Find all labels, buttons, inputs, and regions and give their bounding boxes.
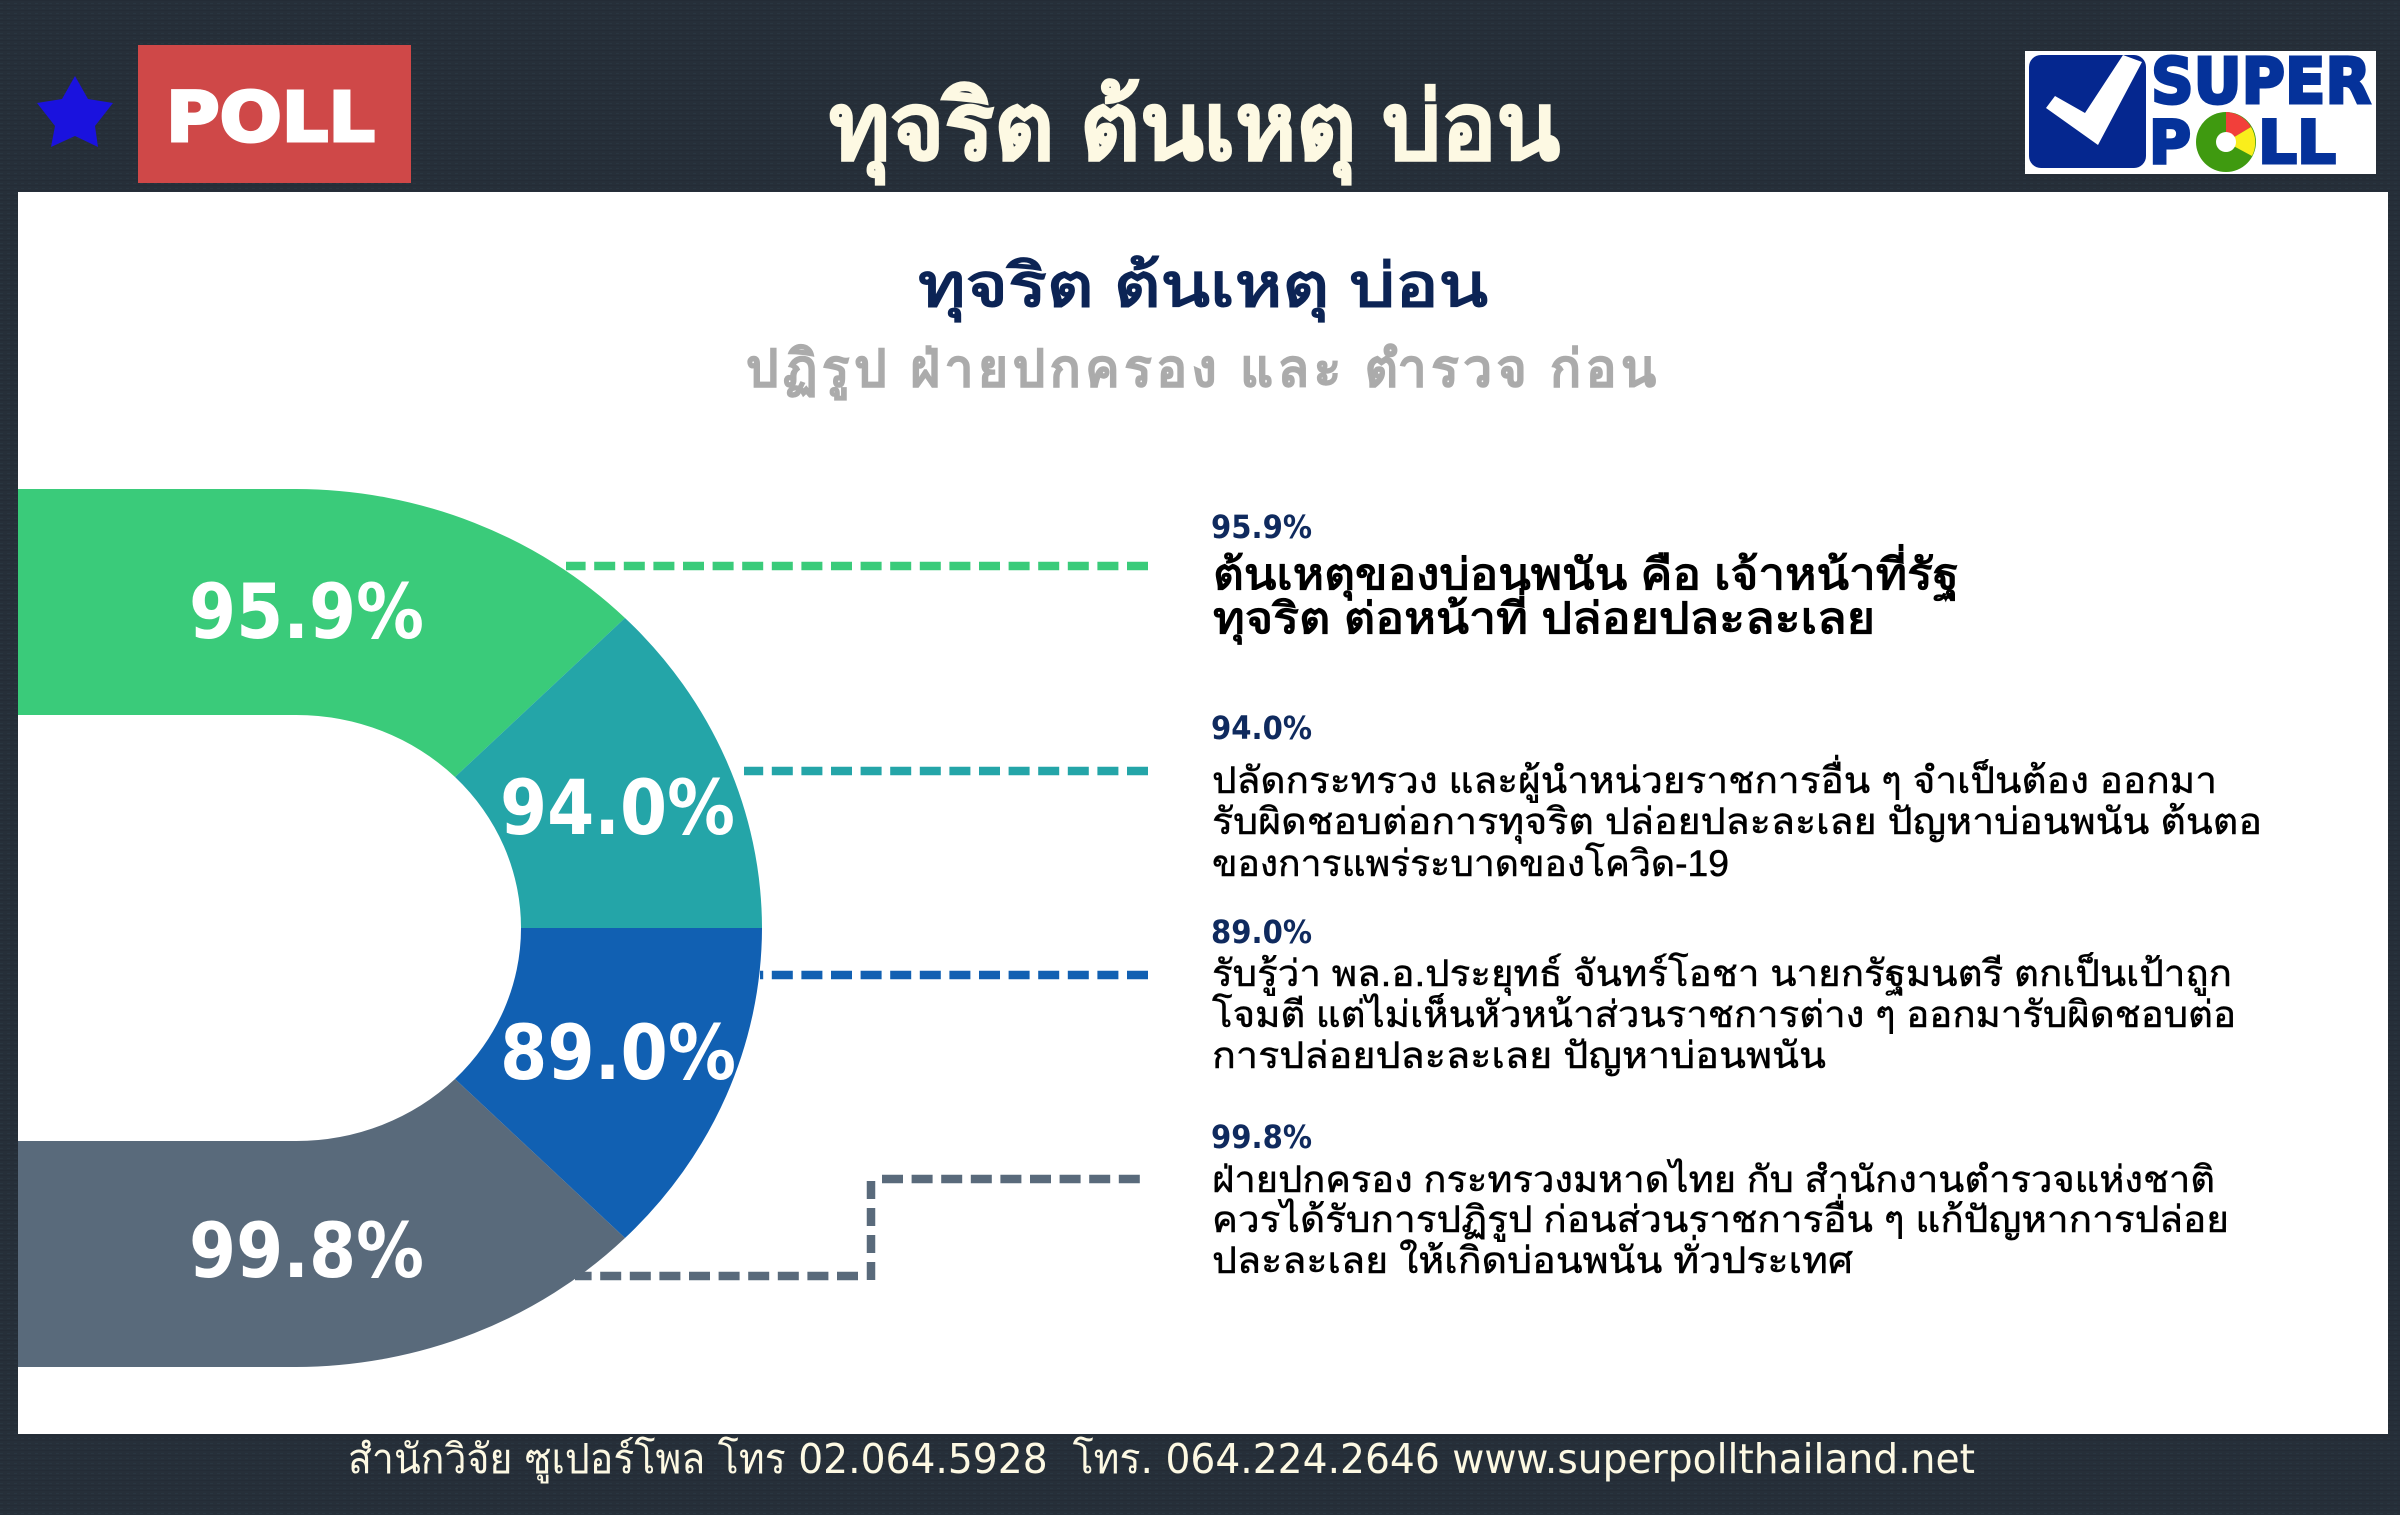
text block: 94.0%: ปลัดกระทรวง และผู้นำหน่วยราชการอื่น ๆ จำเป็นต้อง ออกมา [1212, 754, 2217, 803]
badge: POLL [138, 45, 411, 183]
segment: 95.9%: 95.9% [189, 567, 424, 656]
logo: Super Poll: LL [2258, 108, 2336, 178]
text block: 89.0%: 89.0% [1211, 913, 1312, 951]
text block: 94.0%: 94.0% [1211, 709, 1312, 747]
subheading: ปฏิรูป ฝ่ายปกครอง และ ตำรวจ ก่อน [746, 340, 1656, 401]
segment: 99.8%: 99.8% [189, 1206, 424, 1295]
segment: 89.0% [455, 928, 762, 1238]
segment: 94.0%: 94.0% [500, 763, 735, 852]
connector: blue [760, 971, 1148, 979]
text block: 94.0%: รับผิดชอบต่อการทุจริต ปล่อยปละละเลย ปัญหาบ่อนพนัน ต้นตอ [1212, 801, 2262, 844]
text block: 99.8%: 99.8% [1211, 1118, 1312, 1156]
logo: Super Poll: P [2149, 108, 2191, 178]
heading: ทุจริต ต้นเหตุ บ่อน [918, 252, 1488, 323]
segment: 94.0% [455, 618, 762, 928]
text block: 89.0%: การปล่อยปละละเลย ปัญหาบ่อนพนัน [1212, 1035, 1826, 1077]
text block: 94.0% [1211, 709, 2262, 884]
segment: 95.9% [18, 489, 625, 777]
footer: contact line: สำนักวิจัย ซูเปอร์โพล โทร 02.064.5928 โทร. 064.224.2646 www.superpollthailand.net [348, 1435, 1975, 1484]
logo: Super Poll [2025, 45, 2376, 178]
connector: teal [744, 767, 1148, 775]
chart: segmented rounded band [18, 489, 762, 1367]
text block: 99.8%: ควรได้รับการปฏิรูป ก่อนส่วนราชการอื่น ๆ แก้ปัญหาการปล่อย [1212, 1193, 2229, 1242]
segment: 99.8% [18, 1079, 625, 1367]
text block: 95.9% [1211, 508, 1959, 646]
text block: 94.0%: ของการแพร่ระบาดของโควิด-19 [1212, 842, 1729, 884]
text block: 89.0% [1211, 913, 2236, 1077]
text block: 95.9%: ทุจริต ต่อหน้าที่ ปล่อยปละละเลย [1213, 588, 1875, 646]
title: ทุจริต ต้นเหตุ บ่อน [829, 74, 1560, 185]
segment: 89.0%: 89.0% [500, 1008, 736, 1097]
connector: gray [575, 1179, 1140, 1280]
icon: blue star [37, 76, 113, 147]
connector: green [566, 562, 1148, 570]
text block: 89.0%: รับรู้ว่า พล.อ.ประยุทธ์ จันทร์โอชา นายกรัฐมนตรี ตกเป็นเป้าถูก [1212, 950, 2232, 996]
text block: 99.8%: ปละละเลย ให้เกิดบ่อนพนัน ทั่วประเทศ [1212, 1234, 1854, 1281]
text block: 99.8%: ฝ่ายปกครอง กระทรวงมหาดไทย กับ สำนักงานตำรวจแห่งชาติ [1212, 1158, 2215, 1200]
badge: POLL: POLL [166, 78, 375, 158]
text block: 95.9%: 95.9% [1211, 508, 1312, 546]
text block: 99.8% [1211, 1118, 2229, 1281]
logo: Super Poll: SUPER [2151, 45, 2371, 118]
text block: 95.9%: ต้นเหตุของบ่อนพนัน คือ เจ้าหน้าที่รัฐ [1213, 544, 1959, 602]
text block: 89.0%: โจมตี แต่ไม่เห็นหัวหน้าส่วนราชการต่าง ๆ ออกมารับผิดชอบต่อ [1212, 991, 2236, 1035]
